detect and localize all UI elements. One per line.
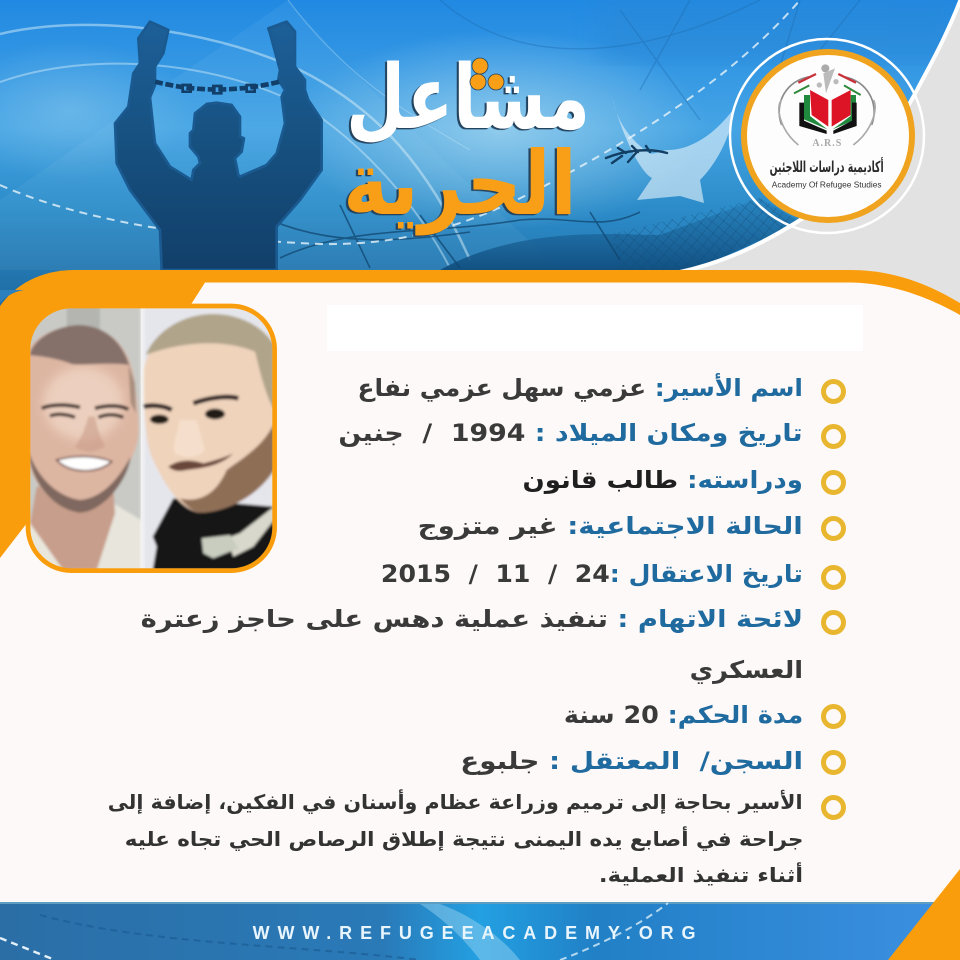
orange corner [888,869,960,960]
row: prisoner name: اسم الأسير: عزمي سهل عزمي نفاع [358,374,803,402]
row: charges line one: لائحة الاتهام : تنفيذ عملية دهس على حاجز زعترة [140,605,803,633]
fence and barbed wire [260,198,800,272]
photo frame [28,306,275,571]
row: medical note line two: جراحة في أصابع يده اليمنى نتيجة إطلاق الرصاص الحي تجاه عليه [124,827,803,851]
title word: مشاعل: مشاعل [346,45,590,149]
portrait: right man with tracheostomy tube [144,307,274,570]
panel: orange band and info background [0,270,960,960]
website url: WWW.REFUGEEACADEMY.ORG [253,923,703,943]
portrait photos in orange frame [28,306,275,571]
portrait: left man smiling [28,307,141,570]
row: prison: السجن/ المعتقل : جلبوع [460,747,803,775]
row: medical note line one: الأسير بحاجة إلى ترميم وزراعة عظام وأسنان في الفكين، إضافة إلى [108,790,803,814]
blank white label box [327,305,863,351]
logo badge [730,39,924,233]
row: study: ودراسته: طالب قانون [523,466,803,494]
icon: peace dove with olive branch [606,97,735,203]
bullet: charges [821,610,846,635]
three orange dots on the white word [470,58,504,90]
chain between wrists [155,82,280,93]
bullet: study [821,470,846,495]
bullet: medical note [821,795,846,820]
bullet: name [821,379,846,404]
bullet: prison [821,750,846,775]
row: charges line two: العسكري [689,656,803,684]
title word: الحرية: الحرية [343,132,577,236]
silhouette: prisoner with chained raised fists [115,22,322,270]
logo emblem: book [770,64,884,190]
logo text: A.R.S: A.R.S [812,138,842,149]
info list [108,373,846,887]
title: مشاعل الحرية [343,45,590,236]
bullet: marital status [821,516,846,541]
footer band [0,869,960,960]
logo text: Arabic name: أكاديمية دراسات اللاجئين [770,156,884,176]
bullet: birth [821,424,846,449]
header banner background [0,0,960,320]
row: marital status: الحالة الاجتماعية: غير متزوج [418,512,803,540]
dashed flight lines [0,0,800,244]
row: sentence: مدة الحكم: 20 سنة [564,701,803,729]
bullet: sentence [821,704,846,729]
divider [141,308,142,519]
row: medical note line three: أثناء تنفيذ العملية. [599,863,803,887]
row: birth date and place: تاريخ ومكان الميلاد : 1994 / جنين [339,419,803,447]
bullet: arrest date [821,565,846,590]
logo text: English name: Academy Of Refugee Studies [772,180,882,190]
row: arrest date: تاريخ الاعتقال :24 / 11 / 2015 [381,560,803,588]
